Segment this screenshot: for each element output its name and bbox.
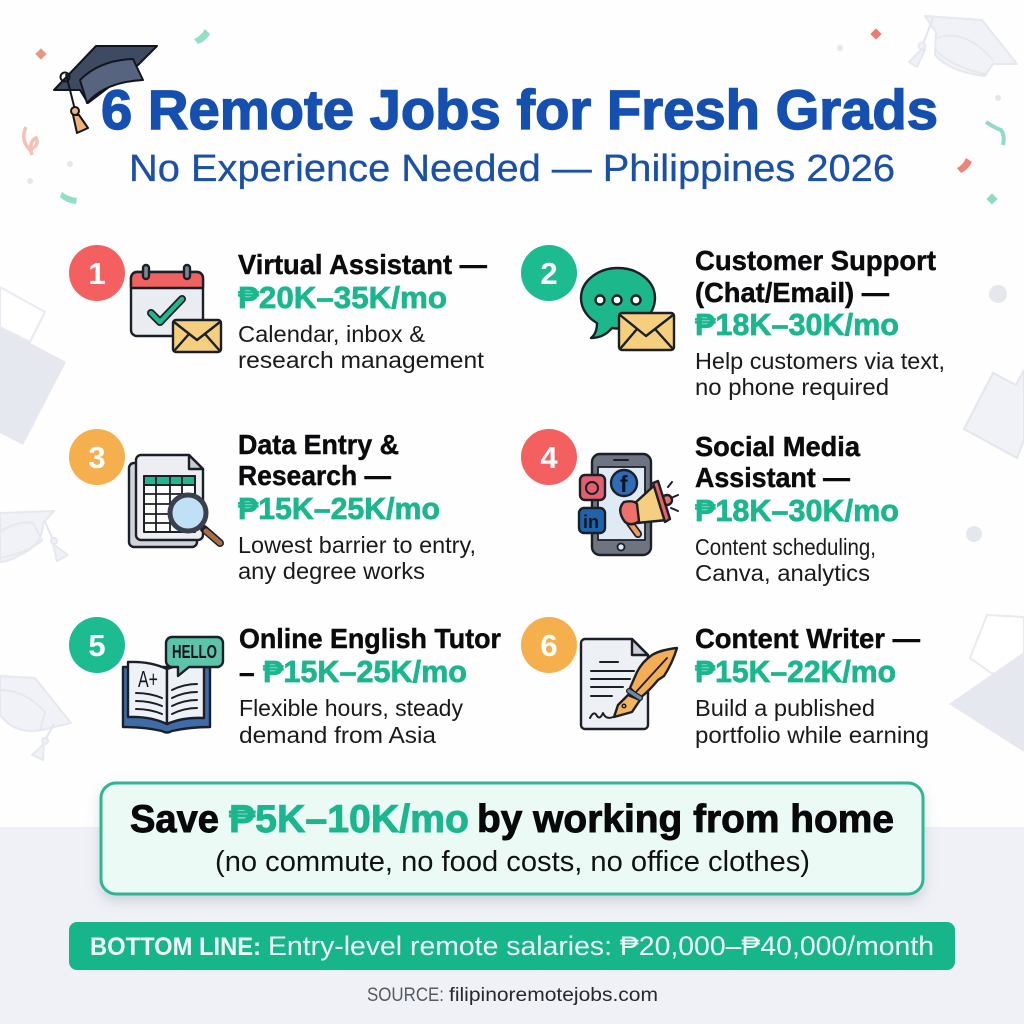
job 3 text: any degree works <box>238 558 425 584</box>
book and bubble labels <box>138 642 217 692</box>
icon: open book with hello bubble <box>123 637 223 732</box>
job 4 text <box>695 431 899 586</box>
job 5: online english tutor <box>69 617 501 748</box>
bottom line banner: BOTTOM LINE: <box>90 933 261 961</box>
job 2 text: (Chat/Email) — <box>695 277 889 308</box>
number badge 5 <box>69 617 125 673</box>
job 1 text: research management <box>238 347 484 373</box>
job 5 text <box>239 623 501 748</box>
source line <box>367 985 658 1006</box>
bottom line banner: Entry-level remote salaries: ₱20,000–₱40,000/month <box>268 931 934 961</box>
job 3: data entry and research <box>69 429 476 584</box>
decorative faint caps and shapes <box>0 16 1024 760</box>
callout: savings <box>101 783 923 894</box>
number badge 1 <box>69 245 125 301</box>
number badge 3: 3 <box>88 440 106 475</box>
callout subline: (no commute, no food costs, no office clothes) <box>215 846 810 878</box>
confetti <box>24 28 1004 205</box>
job 1 text: ₱20K–35K/mo <box>238 280 447 315</box>
callout headline <box>130 798 894 841</box>
source line: SOURCE: <box>367 985 444 1006</box>
job 4 text: Assistant — <box>695 462 850 493</box>
title: 6 Remote Jobs for Fresh Grads <box>101 78 938 141</box>
icon: calendar with envelope <box>131 265 221 352</box>
job 6 text: Build a published <box>695 695 875 721</box>
social logo letters: in <box>583 512 599 532</box>
job 2 text: no phone required <box>695 374 889 400</box>
job 3 text: Research — <box>238 460 391 491</box>
job 5 text: ₱15K–25K/mo <box>263 654 467 689</box>
job 6: content writer <box>521 617 929 748</box>
job 2 text: Help customers via text, <box>695 348 945 374</box>
job 3 text <box>238 429 476 584</box>
job 3 text: ₱15K–25K/mo <box>238 491 440 526</box>
job 2: customer support <box>521 245 945 400</box>
number badge 2: 2 <box>540 256 558 291</box>
icon: spreadsheet with magnifier <box>129 455 220 547</box>
number badge 6: 6 <box>540 628 558 663</box>
job 4: social media assistant <box>521 429 899 586</box>
job 5 text: Online English Tutor <box>239 623 501 654</box>
job 5 text: Flexible hours, steady <box>239 695 463 721</box>
callout headline: ₱5K–10K/mo <box>229 798 469 841</box>
job 4 text: Canva, analytics <box>695 560 870 586</box>
subtitle: No Experience Needed — Philippines 2026 <box>129 148 895 190</box>
job 2 text: ₱18K–30K/mo <box>695 307 899 342</box>
social logo letters: f <box>620 471 628 497</box>
number badge 5: 5 <box>88 628 106 663</box>
number badge 4 <box>521 429 577 485</box>
number badge 1: 1 <box>88 256 106 291</box>
job 1 text: Virtual Assistant — <box>238 249 487 280</box>
job 4 text: ₱18K–30K/mo <box>695 493 899 528</box>
icon: phone with social logos and megaphone <box>579 454 678 555</box>
job 2 text: Customer Support <box>695 245 936 276</box>
job 4 text: Content scheduling, <box>695 534 876 560</box>
job 1: virtual assistant <box>69 245 487 373</box>
job 4 text: Social Media <box>695 431 860 462</box>
number badge 3 <box>69 429 125 485</box>
social logo letters <box>583 471 628 532</box>
job 6 text: ₱15K–22K/mo <box>695 654 896 689</box>
icon: chat bubble with envelope <box>581 268 674 350</box>
book and bubble labels: HELLO <box>172 642 217 662</box>
book and bubble labels: A+ <box>138 666 158 692</box>
job 5 text: demand from Asia <box>239 722 437 748</box>
job 3 text: Data Entry & <box>238 429 399 460</box>
job 6 text: portfolio while earning <box>695 722 929 748</box>
number badge 2 <box>521 245 577 301</box>
icon: document with quill pen <box>581 639 677 729</box>
source line: filipinoremotejobs.com <box>449 985 658 1006</box>
callout headline: Save <box>130 798 219 841</box>
number badge 4: 4 <box>540 440 558 475</box>
job 1 text: Calendar, inbox & <box>238 321 425 347</box>
job 1 text <box>238 249 487 373</box>
bottom line banner <box>69 922 955 970</box>
job 5 text: – <box>239 657 255 688</box>
job 2 text <box>695 245 945 400</box>
job 6 text <box>695 623 929 748</box>
job 3 text: Lowest barrier to entry, <box>238 532 476 558</box>
callout headline: by working from home <box>477 798 894 841</box>
job 6 text: Content Writer — <box>695 623 920 654</box>
number badge 6 <box>521 617 577 673</box>
callout box <box>101 783 923 894</box>
icon: graduation cap <box>54 46 157 133</box>
